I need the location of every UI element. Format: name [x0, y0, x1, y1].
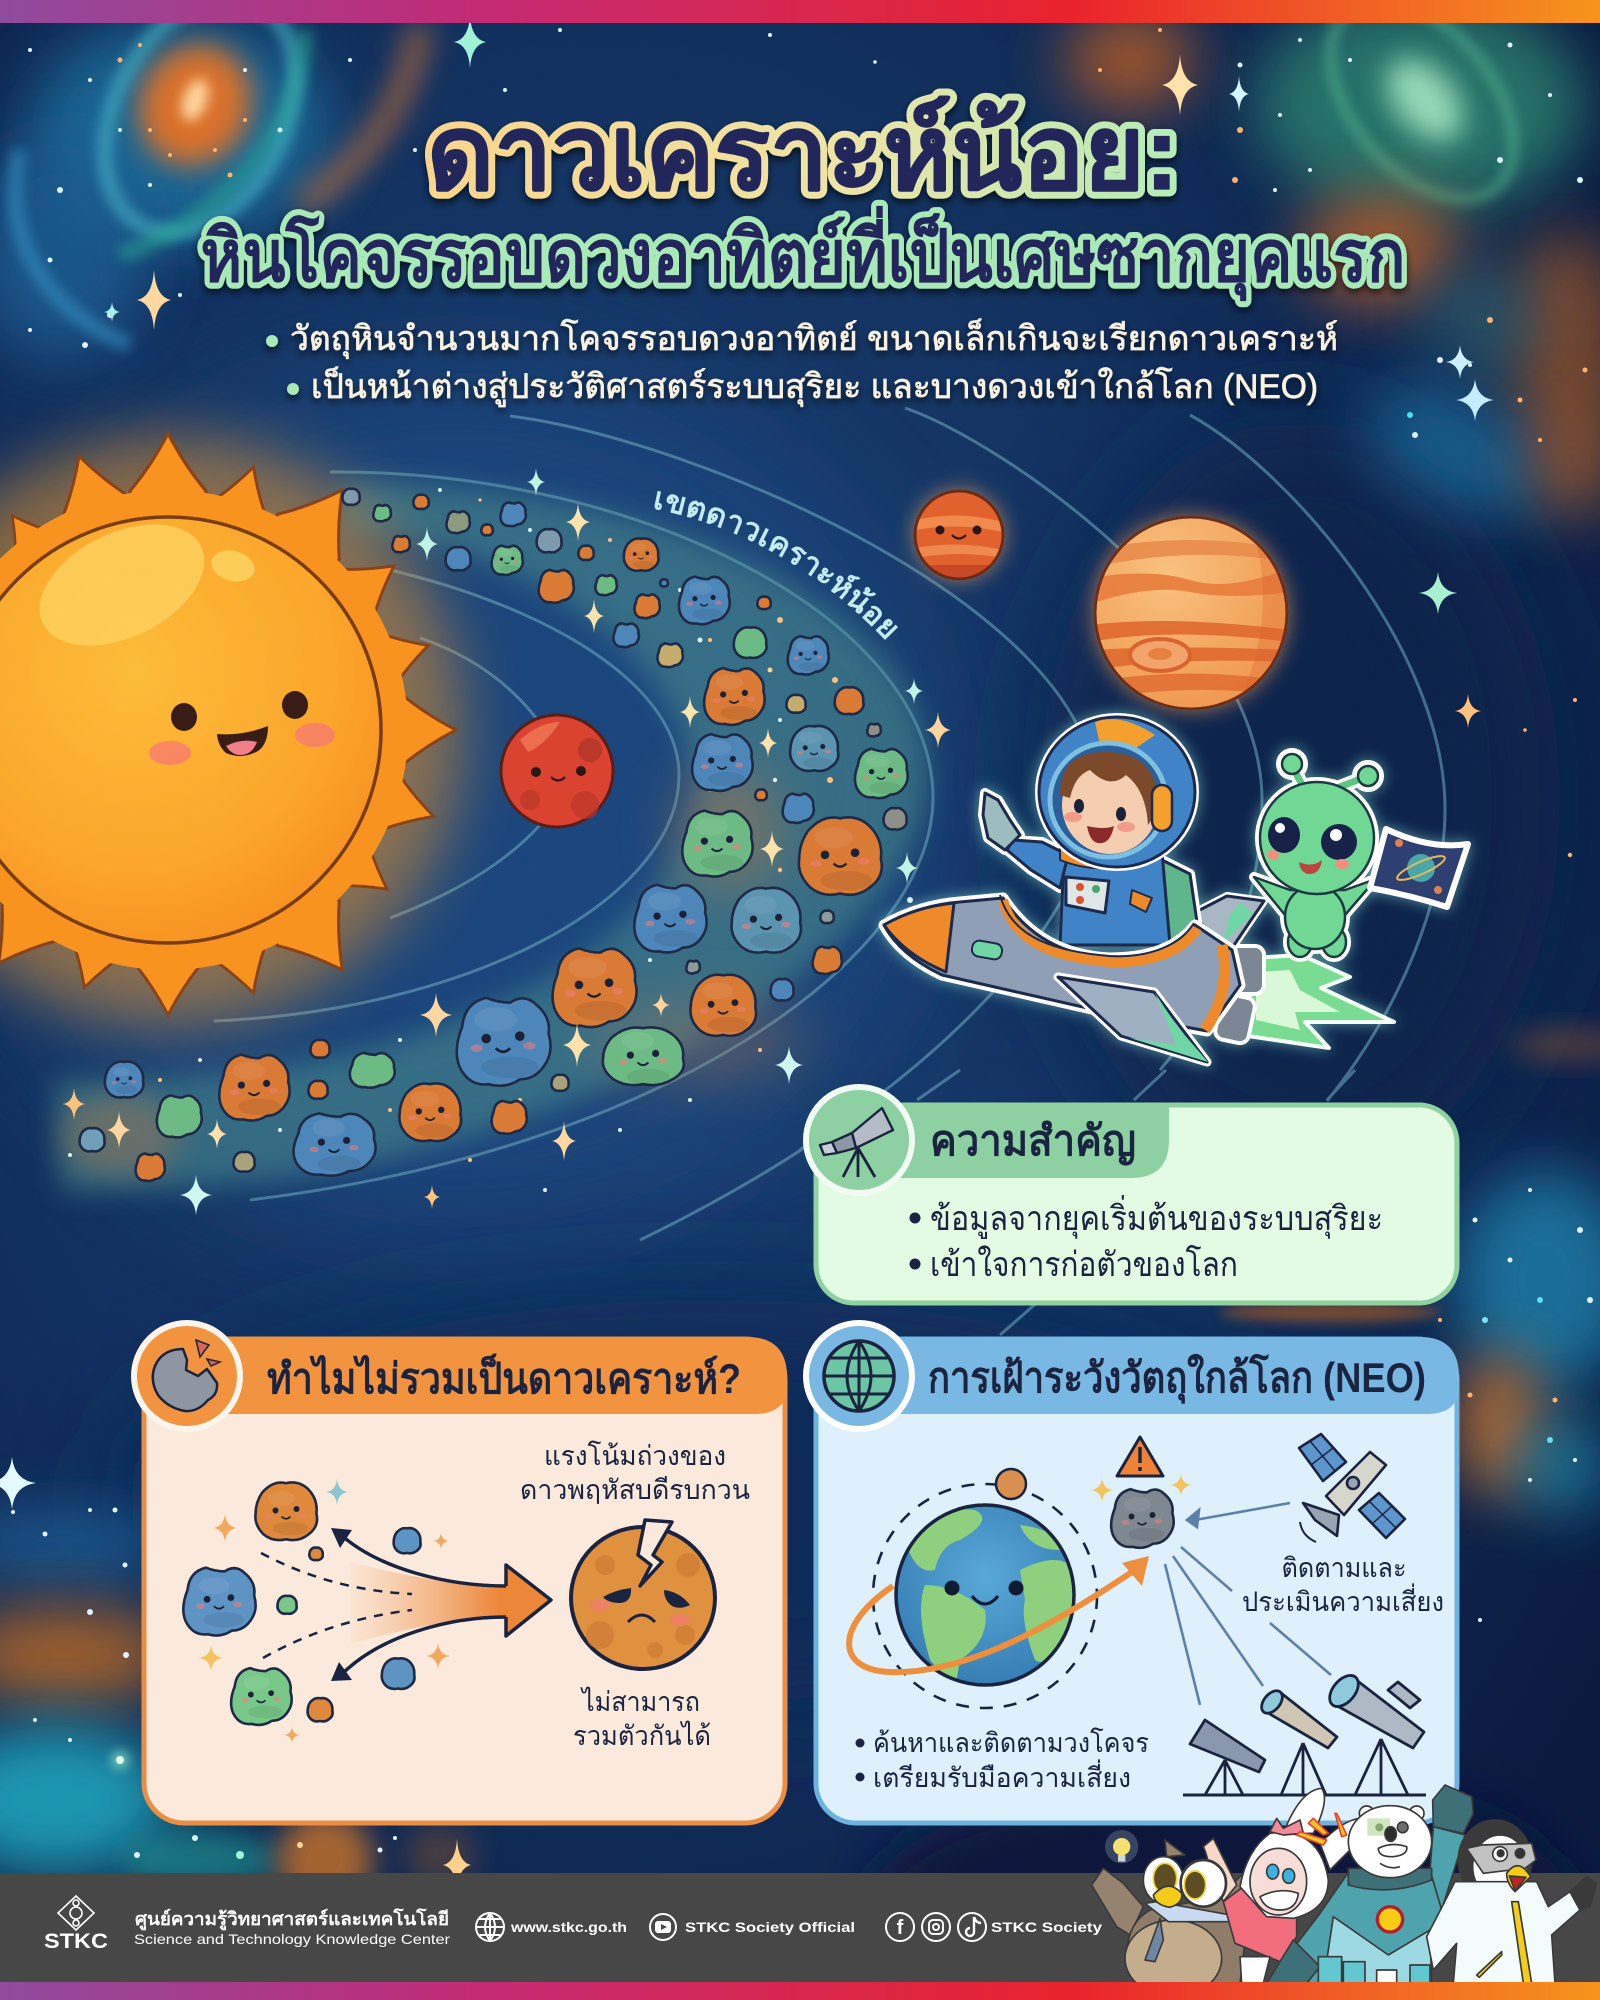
galaxy top right	[1065, 0, 1600, 450]
icon: telescopes	[1183, 1670, 1426, 1795]
footer organisation name	[134, 1908, 450, 1947]
intro bullets: วัตถุหินจำนวนมากโคจรรอบดวงอาทิตย์ ขนาดเล็กเกินจะเรียกดาวเคราะห์	[290, 318, 1338, 359]
footer web link: www.stkc.go.th	[510, 1919, 627, 1935]
orbit lines	[214, 408, 1445, 1335]
panel: NEO watch	[806, 1323, 1459, 1823]
NEO bullets	[856, 1728, 1149, 1793]
importance bullets	[910, 1195, 1383, 1284]
galaxy top left	[0, 0, 420, 360]
nebula right side	[1220, 358, 1600, 1515]
rocket body	[884, 898, 1240, 1031]
bunny	[1223, 1788, 1363, 1983]
rocket nose	[884, 903, 954, 972]
rocket flame	[1248, 955, 1394, 1048]
arrow: NEO orbit	[849, 1556, 1149, 1672]
cockpit rim	[1003, 900, 1197, 962]
title: หินโคจรรอบดวงอาทิตย์ที่เป็นเศษซากยุคแรก	[200, 205, 1406, 302]
astronaut backpack, torso and arm	[983, 793, 1197, 945]
blue heading: การเฝ้าระวังวัตถุใกล้โลก (NEO)	[928, 1353, 1426, 1404]
importance header	[860, 1106, 1169, 1178]
belt dust dots	[68, 488, 913, 1192]
cannot combine caption: ไม่สามารถ	[580, 1687, 700, 1717]
gravity caption: ดาวพฤหัสบดีรบกวน	[520, 1475, 750, 1505]
footer youtube: STKC Society Official	[685, 1919, 855, 1935]
arrow: gravity push	[261, 1528, 551, 1681]
footer logo	[44, 1896, 108, 1953]
importance bullets: ข้อมูลจากยุคเริ่มต้นของระบบสุริยะ	[930, 1195, 1383, 1239]
label: asteroid belt curved: เขตดาวเคราะห์น้อย	[654, 490, 898, 640]
rocket tail fin	[1190, 896, 1264, 948]
footer band	[0, 1873, 1600, 2000]
asteroid belt glow	[55, 480, 928, 1191]
asteroids: large rocks with faces	[105, 538, 908, 1176]
flag	[1370, 829, 1468, 907]
footer web link	[476, 1913, 627, 1941]
planet: small orange	[915, 491, 1005, 581]
blue header	[875, 1337, 1459, 1414]
rocket thrusters	[1216, 948, 1262, 1042]
earth with orbit	[873, 1469, 1097, 1708]
satellite caption: ประเมินความเสี่ยง	[1242, 1583, 1444, 1617]
astronaut face	[1064, 799, 1135, 843]
sun face	[149, 691, 335, 765]
belt sparkles	[63, 468, 951, 1215]
planet: jupiter	[1090, 517, 1295, 720]
satellite caption	[1242, 1553, 1444, 1617]
gravity caption: แรงโน้มถ่วงของ	[544, 1441, 726, 1471]
icon: globe	[806, 1323, 912, 1429]
lightbulb	[1105, 1830, 1138, 1863]
title: ดาวเคราะห์น้อย:	[427, 95, 1179, 212]
red planet	[501, 715, 613, 827]
footer social icons	[886, 1913, 1102, 1941]
cannot combine caption: รวมตัวกันได้	[573, 1721, 711, 1751]
gravity caption	[520, 1441, 750, 1505]
owl	[1092, 1838, 1247, 1997]
sun	[0, 433, 463, 1025]
panel: why not a planet	[134, 1323, 787, 1823]
rocks scattering	[183, 1479, 450, 1743]
intro bullets	[266, 318, 1338, 407]
title: หินโคจรรอบดวงอาทิตย์ที่เป็นเศษซากยุคแรก	[200, 205, 1406, 302]
icon: broken rock	[134, 1323, 240, 1429]
helmet	[1039, 717, 1195, 867]
orange heading: ทำไมไม่รวมเป็นดาวเคราะห์?	[267, 1353, 741, 1402]
footer organisation name: ศูนย์ความรู้วิทยาศาสตร์และเทคโนโลยี	[135, 1908, 449, 1931]
NEO bullets: ค้นหาและติดตามวงโคจร	[873, 1728, 1149, 1758]
observation lines	[1165, 1503, 1331, 1705]
icon: satellite	[1299, 1434, 1405, 1542]
top gradient bar	[0, 0, 1600, 23]
footer logo: STKC	[44, 1930, 108, 1953]
satellite caption: ติดตามและ	[1282, 1553, 1406, 1583]
title	[200, 95, 1406, 302]
mascots	[1092, 1785, 1597, 1997]
panel: importance	[806, 1087, 1457, 1303]
alien	[1254, 753, 1379, 957]
asteroids: small dots	[80, 489, 907, 1181]
footer organisation name: Science and Technology Knowledge Center	[134, 1931, 450, 1947]
footer social icons: STKC Society	[991, 1919, 1102, 1935]
NEO bullets: เตรียมรับมือความเสี่ยง	[873, 1759, 1131, 1793]
orange star dots	[118, 28, 1588, 1402]
title: ดาวเคราะห์น้อย:	[427, 95, 1179, 212]
footer youtube	[650, 1914, 855, 1940]
icon: telescope	[806, 1087, 912, 1193]
intro bullets: เป็นหน้าต่างสู่ประวัติศาสตร์ระบบสุริยะ และบางดวงเข้าใกล้โลก (NEO)	[311, 366, 1318, 407]
sad broken planet	[571, 1520, 715, 1669]
footer social icons: f	[897, 1917, 904, 1939]
astronaut on rocket with alien	[884, 717, 1468, 1062]
cannot combine caption	[573, 1687, 711, 1751]
nebula bottom left	[0, 1510, 475, 1908]
warning sign and near-earth asteroid	[1091, 1437, 1192, 1548]
orange header	[200, 1337, 787, 1414]
wing	[1058, 977, 1207, 1062]
bear	[1267, 1785, 1473, 1983]
importance bullets: เข้าใจการก่อตัวของโลก	[930, 1245, 1238, 1284]
importance heading: ความสำคัญ	[930, 1117, 1136, 1166]
penguin	[1427, 1820, 1597, 1983]
